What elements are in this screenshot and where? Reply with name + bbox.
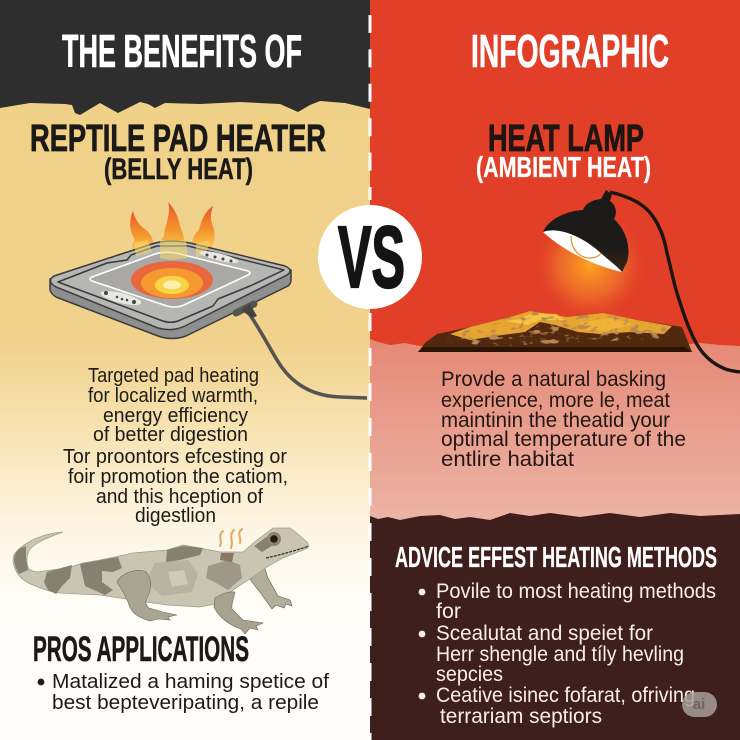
lizard lighter patches [146, 560, 198, 596]
heading: pros applications: PROS APPLICATIONS [33, 630, 249, 669]
pad inner panel [90, 252, 250, 307]
list: heating method advice [419, 580, 716, 728]
lamp opening and bulb [543, 230, 622, 272]
control buttons [99, 249, 239, 308]
text block: pad heater benefits: and this hception of [96, 486, 263, 508]
text block: pad heater benefits: digestlion [135, 505, 216, 527]
pad top surface [50, 241, 290, 330]
basking rock [418, 311, 692, 352]
lizard far leg [246, 566, 292, 609]
list: heating method advice: Ceative isinec fofarat, ofriving [436, 684, 695, 707]
vs badge [318, 205, 422, 309]
text block: pad heater benefits: energy efficiency [103, 405, 248, 427]
lizard markings [14, 533, 278, 595]
watermark: ai badge [682, 692, 717, 717]
icon: heat lamp over basking rock [418, 190, 740, 372]
heat wisps [220, 529, 242, 548]
pad base [50, 270, 291, 338]
text block: pad heater benefits [63, 365, 288, 527]
text block: pad heater benefits: Targeted pad heating [88, 365, 259, 387]
list: heating method advice: terrariam septiors [440, 705, 602, 728]
text block: pad heater benefits: Tor proontors efcesting or [63, 446, 287, 468]
heating coil rings [131, 261, 213, 299]
text block: heat lamp benefits: entlire habitat [441, 448, 574, 471]
list: pros applications: best bepteveripating, a repile [52, 692, 319, 714]
lamp arm cable [610, 192, 740, 372]
icon: heating pad with flames [50, 202, 367, 398]
lizard front leg [214, 592, 263, 634]
lizard rear leg [117, 570, 177, 621]
panel: right column salmon text band [370, 339, 740, 530]
power cable [248, 312, 367, 398]
lamp glow [532, 207, 648, 323]
icon: flames [130, 202, 215, 256]
center dashed divider [368, 15, 372, 740]
list: heating method advice: sepcies [436, 663, 503, 686]
subheading: ambient heat: (AMBIENT HEAT) [476, 152, 651, 184]
text block: pad heater benefits: for localized warmth, [88, 385, 258, 407]
lizard body [13, 528, 308, 607]
text block: heat lamp benefits: maintinin the theatid your [441, 409, 670, 432]
list: pros applications [38, 671, 329, 714]
text block: heat lamp benefits: Provde a natural basking [441, 368, 666, 391]
list: pros applications: Matalized a haming spetice of [52, 671, 329, 693]
panel: right column background [370, 0, 740, 740]
panel: dark header with torn edge [0, 0, 370, 115]
list: heating method advice: Scealutat and speiet for [436, 622, 653, 645]
list: heating method advice: for [436, 600, 461, 623]
icon: lizard [13, 528, 309, 634]
heading: heat lamp: HEAT LAMP [488, 118, 644, 160]
heading: reptile pad heater: REPTILE PAD HEATER [30, 118, 326, 160]
list: heating method advice: Herr shengle and tíly hevling [436, 643, 684, 666]
lizard eye and mouth [266, 532, 309, 558]
power plug [236, 304, 257, 318]
panel: dark advice section with torn edge [370, 513, 740, 740]
translucent flame bases over pad [134, 240, 210, 260]
text block: heat lamp benefits: experience, more le, meat [441, 389, 670, 412]
text block: pad heater benefits: foir promotion the catiom, [68, 466, 288, 488]
list: heating method advice: Povile to most heating methods [436, 580, 716, 603]
subheading: belly heat: (BELLY HEAT) [104, 153, 253, 186]
vs badge: VS [338, 209, 405, 306]
text block: heat lamp benefits [441, 368, 686, 471]
text block: heat lamp benefits: optimal temperature of the [441, 428, 686, 451]
lamp shade [543, 190, 629, 272]
title: the benefits of: THE BENEFITS OF [62, 25, 302, 77]
watermark: ai badge: ai [693, 696, 705, 713]
panel: left column background [0, 0, 370, 740]
text block: pad heater benefits: of better digestion [93, 424, 248, 446]
